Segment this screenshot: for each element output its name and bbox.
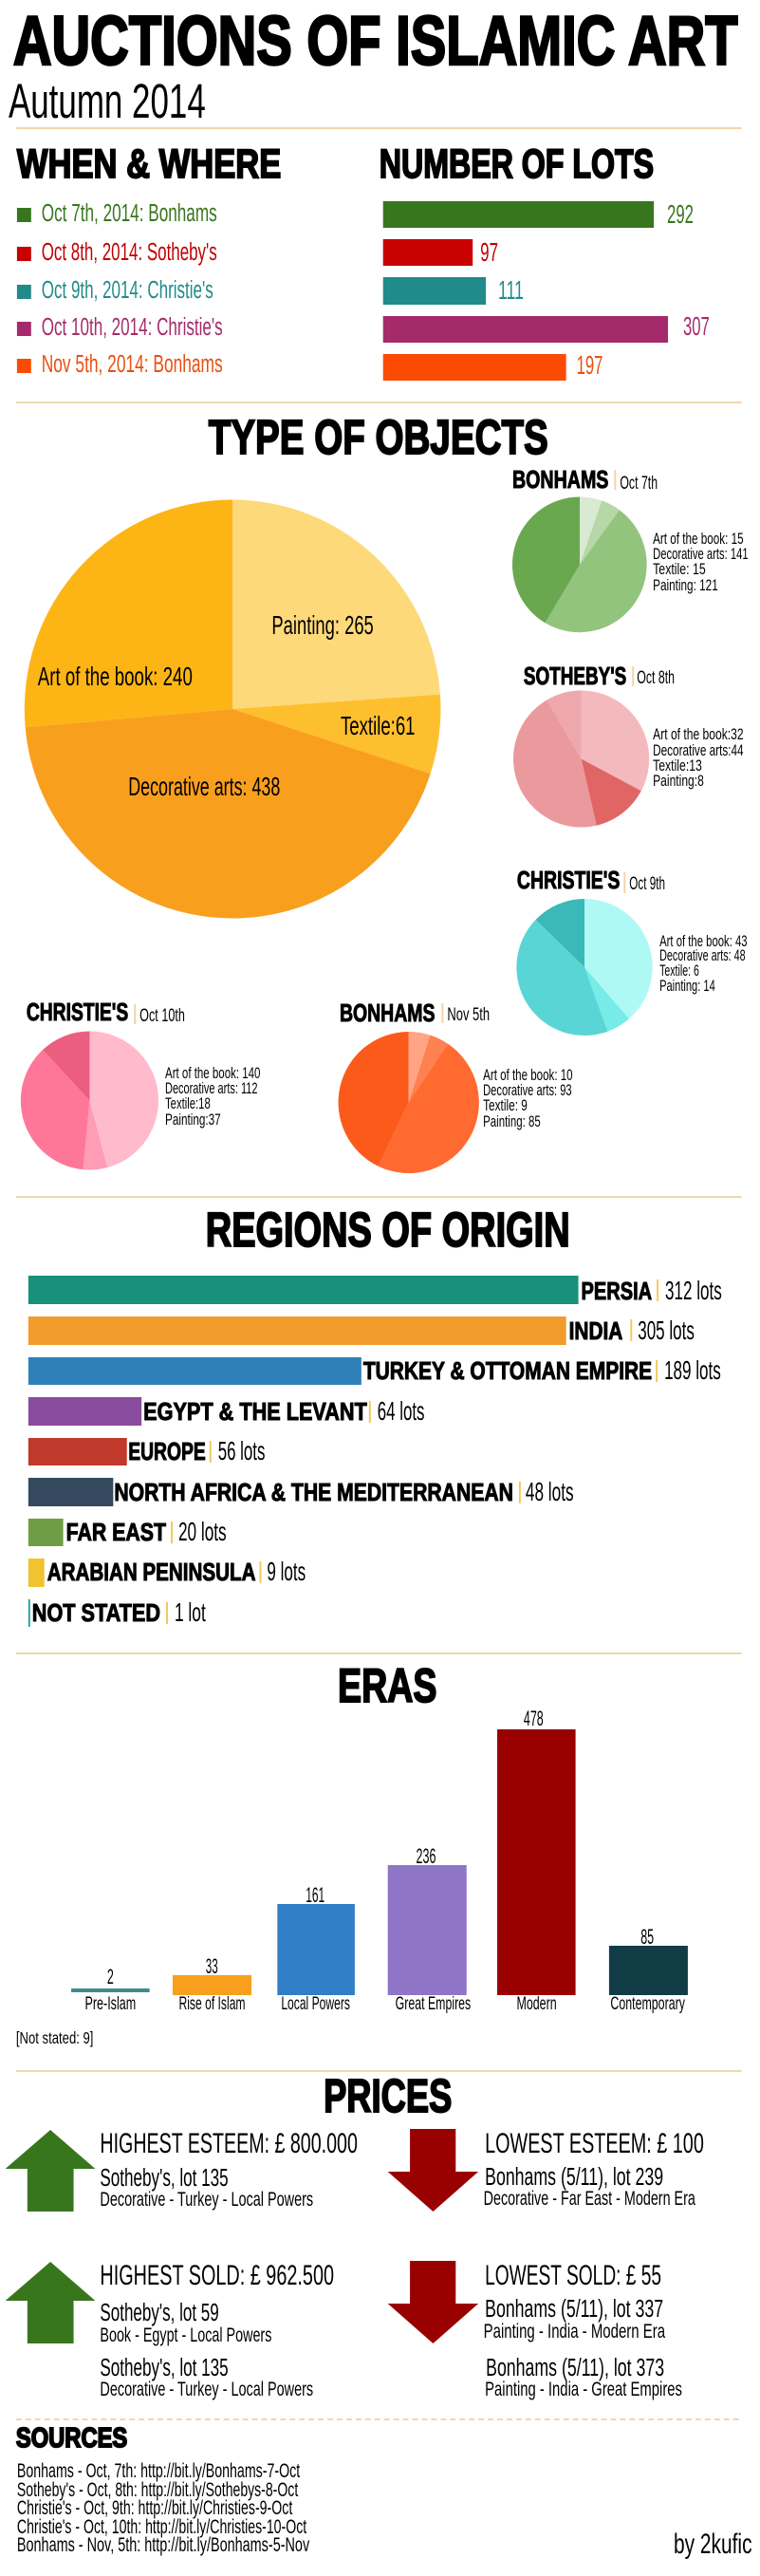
pie group: Sothebys Oct 8th: SOTHEBY'S — [524, 663, 626, 690]
pie group: Christies Oct 9th: Painting: 14 — [659, 977, 715, 995]
pie group: Bonhams Oct 7th: Textile: 15 — [653, 560, 706, 578]
legend: Oct 8th Sothebys: Oct 8th, 2014: Sotheby's — [42, 239, 217, 266]
pie chart: all auctions: Textile:61 — [341, 711, 416, 740]
column: Contemporary — [609, 1925, 688, 2014]
pie group: Sothebys Oct 8th: Painting:8 — [653, 772, 704, 790]
block: lowest sold: Bonhams (5/11), lot 373 — [486, 2355, 664, 2381]
heading: eras: ERAS — [338, 1659, 436, 1712]
column: Contemporary: Contemporary — [610, 1994, 685, 2014]
block: lowest sold: Bonhams (5/11), lot 337 — [485, 2296, 663, 2323]
source list: Christie's - Oct, 10th: http://bit.ly/Christies-10-Oct — [17, 2516, 306, 2538]
column: Modern: Modern — [516, 1994, 557, 2014]
bar: Persia: 312 lots — [665, 1276, 722, 1305]
bar: Far East — [28, 1517, 227, 1546]
source list: Bonhams - Nov, 5th: http://bit.ly/Bonhams-5-Nov — [17, 2534, 310, 2556]
column: Local Powers: Local Powers — [281, 1994, 350, 2014]
pie group: Christies Oct 9th: Oct 9th — [629, 874, 665, 894]
column: Pre-Islam: Pre-Islam — [84, 1994, 136, 2014]
source list — [17, 2460, 310, 2556]
block: highest sold: Decorative - Turkey - Local Powers — [100, 2379, 313, 2400]
block: highest sold — [100, 2260, 334, 2400]
heading: sources: SOURCES — [16, 2423, 127, 2454]
note: not stated: [Not stated: 9] — [16, 2028, 93, 2047]
bar: 292 lots: 292 — [667, 199, 694, 229]
panel: type of objects — [21, 410, 749, 1173]
column: Great Empires: 236 — [417, 1844, 436, 1868]
pie group: Christies Oct 9th: CHRISTIE'S — [517, 868, 620, 894]
icon: down arrow lowest esteem — [388, 2129, 478, 2212]
icon: up arrow highest sold — [6, 2262, 95, 2343]
bar: 307 lots — [383, 311, 710, 343]
panel: number of lots — [380, 141, 710, 381]
column: Rise of Islam: Rise of Islam — [178, 1994, 246, 2014]
heading: prices: PRICES — [324, 2071, 452, 2122]
bar: Not stated: 1 lot — [175, 1597, 206, 1627]
bar: 307 lots: 307 — [683, 311, 710, 341]
block: highest sold: HIGHEST SOLD: £ 962.500 — [100, 2260, 334, 2291]
pie chart: all auctions — [25, 499, 440, 919]
bar: Persia — [28, 1276, 722, 1305]
block: lowest sold: Painting - India - Modern Era — [484, 2321, 665, 2343]
column: Great Empires — [388, 1844, 471, 2014]
pie chart: all auctions: Painting: 265 — [271, 610, 374, 640]
icon: up arrow highest esteem — [6, 2130, 95, 2212]
bar: Egypt and the Levant: 64 lots — [378, 1396, 424, 1426]
panel: prices — [6, 2071, 704, 2400]
block: lowest sold: LOWEST SOLD: £ 55 — [485, 2260, 661, 2291]
column: Pre-Islam: 2 — [107, 1965, 114, 1988]
block: highest esteem: Sotheby's, lot 135 — [100, 2165, 229, 2192]
subtitle: Autumn 2014 — [9, 74, 206, 128]
block: highest sold: Sotheby's, lot 59 — [100, 2300, 219, 2326]
source list: Sotheby's - Oct, 8th: http://bit.ly/Sothebys-8-Oct — [17, 2479, 298, 2501]
bar: Far East: FAR EAST — [66, 1520, 166, 1546]
pie group: Bonhams Nov 5th: Textile: 9 — [483, 1096, 528, 1114]
column: Local Powers — [277, 1883, 355, 2014]
column: Modern: 478 — [524, 1707, 544, 1730]
block: lowest esteem: Bonhams (5/11), lot 239 — [485, 2164, 663, 2191]
block: highest esteem — [100, 2128, 358, 2211]
column: Contemporary: 85 — [640, 1925, 654, 1949]
bar: Not stated: NOT STATED — [32, 1600, 160, 1627]
block: lowest sold: Painting - India - Great Empires — [485, 2379, 682, 2400]
bar: Europe: EUROPE — [128, 1439, 206, 1465]
bar: Europe — [28, 1436, 265, 1465]
pie group: Bonhams Oct 7th — [512, 467, 749, 632]
pie group: Christies Oct 10th: CHRISTIE'S — [27, 999, 128, 1026]
panel: regions of origin — [28, 1203, 722, 1627]
pie group: Sothebys Oct 8th: Textile:13 — [653, 756, 702, 775]
pie group: Christies Oct 10th: Painting:37 — [165, 1111, 221, 1129]
pie group: Christies Oct 9th: Textile: 6 — [659, 961, 699, 980]
pie group: Sothebys Oct 8th — [513, 663, 744, 828]
bar: 97 lots — [383, 237, 498, 267]
legend: Oct 7th Bonhams: Oct 7th, 2014: Bonhams — [42, 200, 217, 227]
bar: Arabian Peninsula: 9 lots — [267, 1557, 306, 1586]
heading: when and where: WHEN & WHERE — [17, 141, 281, 187]
panel: sources — [16, 2423, 310, 2556]
pie group: Sothebys Oct 8th: Oct 8th — [637, 668, 675, 688]
column: Great Empires: Great Empires — [396, 1994, 471, 2014]
block: lowest sold — [484, 2260, 682, 2400]
block: highest esteem: HIGHEST ESTEEM: £ 800.000 — [100, 2128, 358, 2159]
bar: India: 305 lots — [638, 1316, 695, 1345]
icon: down arrow lowest sold — [388, 2261, 478, 2343]
pie group: Bonhams Nov 5th: BONHAMS — [340, 1000, 435, 1027]
bar: North Africa and the Mediterranean: NORTH AFRICA & THE MEDITERRANEAN — [114, 1480, 513, 1506]
block: highest esteem: Decorative - Turkey - Local Powers — [100, 2189, 313, 2211]
heading: number of lots: NUMBER OF LOTS — [380, 141, 654, 187]
pie group: Bonhams Nov 5th: Nov 5th — [447, 1005, 490, 1025]
source list: Bonhams - Oct, 7th: http://bit.ly/Bonhams-7-Oct — [17, 2460, 300, 2482]
legend: Oct 8th Sothebys — [17, 239, 217, 266]
heading: regions of origin: REGIONS OF ORIGIN — [206, 1203, 570, 1257]
pie group: Christies Oct 10th: Art of the book: 140 — [165, 1064, 260, 1082]
pie group: Bonhams Oct 7th: Painting: 121 — [653, 576, 718, 594]
bar: Egypt and the Levant: EGYPT & THE LEVANT — [143, 1399, 367, 1426]
pie group: Christies Oct 10th: Textile:18 — [165, 1094, 211, 1112]
bar: 111 lots: 111 — [498, 275, 524, 305]
legend: Oct 9th Christies: Oct 9th, 2014: Christie's — [42, 277, 213, 304]
column: Pre-Islam — [71, 1965, 150, 2014]
bar: 111 lots — [383, 275, 524, 305]
legend: Nov 5th Bonhams: Nov 5th, 2014: Bonhams — [42, 351, 223, 378]
legend: Nov 5th Bonhams — [17, 351, 223, 378]
column: Rise of Islam — [173, 1954, 251, 2014]
legend: Oct 10th Christies — [17, 314, 223, 341]
pie group: Bonhams Nov 5th: Art of the book: 10 — [483, 1066, 573, 1084]
legend: Oct 10th Christies: Oct 10th, 2014: Christie's — [42, 314, 223, 341]
pie group: Bonhams Oct 7th: BONHAMS — [512, 467, 608, 494]
source list: Christie's - Oct, 9th: http://bit.ly/Christies-9-Oct — [17, 2497, 292, 2519]
bar: North Africa and the Mediterranean: 48 lots — [526, 1477, 574, 1506]
bar: Europe: 56 lots — [218, 1436, 265, 1465]
bar: 197 lots — [383, 350, 602, 381]
pie group: Bonhams Oct 7th: Oct 7th — [620, 474, 658, 494]
pie chart: all auctions: Decorative arts: 438 — [128, 772, 280, 801]
heading: type of objects: TYPE OF OBJECTS — [209, 410, 548, 464]
block: highest sold: Sotheby's, lot 135 — [100, 2355, 229, 2381]
pie group: Bonhams Nov 5th — [339, 1000, 573, 1173]
bar: Arabian Peninsula: ARABIAN PENINSULA — [47, 1559, 256, 1586]
pie group: Christies Oct 10th — [21, 999, 260, 1170]
legend: Oct 9th Christies — [17, 277, 213, 304]
pie group: Christies Oct 9th — [516, 868, 748, 1036]
pie group: Bonhams Nov 5th: Painting: 85 — [483, 1112, 541, 1130]
panel: eras — [16, 1659, 688, 2047]
bar: Turkey and Ottoman Empire — [28, 1355, 721, 1385]
legend: Oct 7th Bonhams — [17, 200, 217, 227]
column: Local Powers: 161 — [306, 1883, 324, 1907]
bar: 97 lots: 97 — [480, 237, 498, 267]
column: Rise of Islam: 33 — [206, 1954, 218, 1978]
bar: 197 lots: 197 — [577, 350, 602, 380]
panel: when and where — [17, 141, 281, 378]
pie chart: all auctions: Art of the book: 240 — [38, 662, 193, 691]
block: lowest esteem — [484, 2128, 704, 2210]
block: highest sold: Book - Egypt - Local Powers — [100, 2324, 271, 2346]
bar: 292 lots — [383, 199, 694, 229]
bar: Turkey and Ottoman Empire: 189 lots — [664, 1355, 721, 1385]
column: Modern — [497, 1707, 576, 2014]
bar: India — [28, 1316, 695, 1345]
bar: India: INDIA — [569, 1318, 623, 1345]
bar: Persia: PERSIA — [582, 1279, 652, 1305]
pie group: Christies Oct 10th: Oct 10th — [139, 1006, 185, 1026]
pie group: Bonhams Nov 5th: Decorative arts: 93 — [483, 1081, 572, 1099]
bar: Turkey and Ottoman Empire: TURKEY & OTTOMAN EMPIRE — [363, 1358, 652, 1385]
bar: Egypt and the Levant — [28, 1396, 424, 1426]
bar: Far East: 20 lots — [178, 1517, 227, 1546]
pie group: Christies Oct 10th: Decorative arts: 112 — [165, 1079, 257, 1097]
